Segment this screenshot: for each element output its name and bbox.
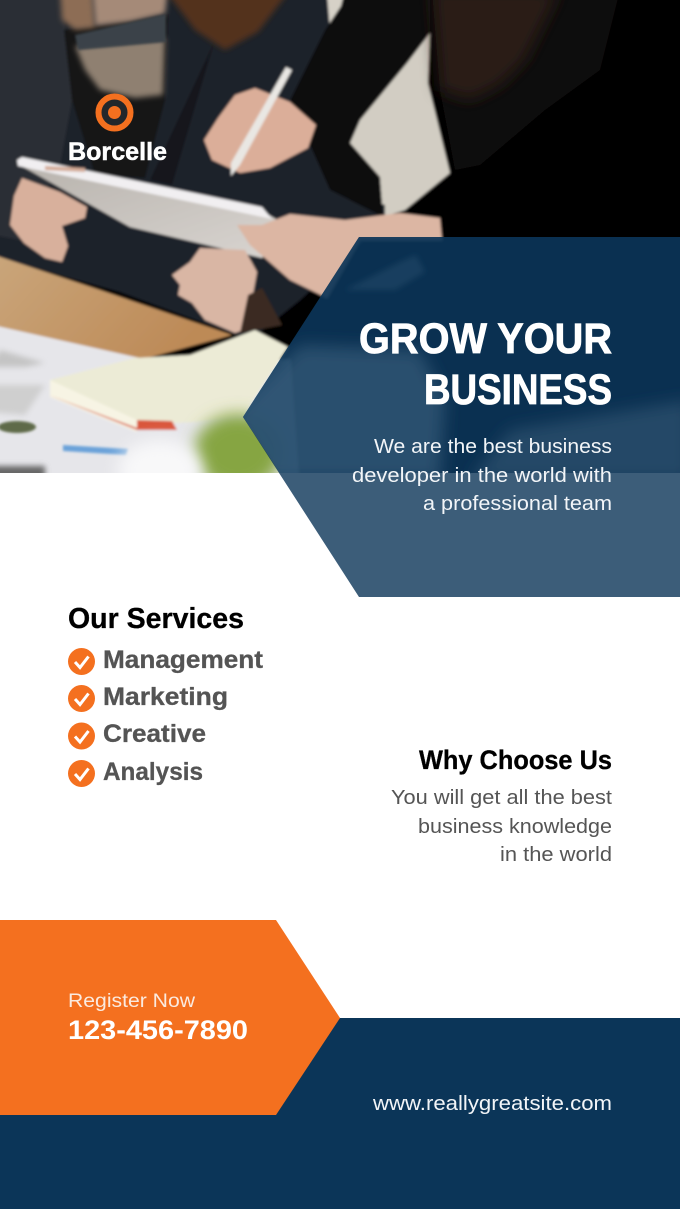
hand: writing <box>204 88 316 173</box>
icon: orange target <box>98 96 130 128</box>
service item: analysis: Analysis <box>103 758 203 786</box>
why choose us body text <box>391 787 612 866</box>
logo: Borcelle <box>68 96 167 166</box>
logo wordmark: Borcelle <box>68 138 167 166</box>
left jacket <box>0 0 385 340</box>
title: Grow Your Business <box>359 315 612 414</box>
service item: marketing: Marketing <box>103 683 228 711</box>
intro text: a professional team <box>423 493 612 515</box>
intro text <box>352 436 612 515</box>
website url: www.reallygreatsite.com <box>372 1093 612 1115</box>
plant and blurred object <box>194 414 282 490</box>
paper <box>0 324 296 473</box>
heading: our services: Our Services <box>68 603 244 635</box>
intro text: We are the best business <box>374 436 612 458</box>
footer navy band <box>0 1018 680 1209</box>
why choose us body text: You will get all the best <box>391 787 612 809</box>
sweater pattern <box>75 38 165 98</box>
service item: management: Management <box>103 646 264 674</box>
sweater <box>64 14 168 178</box>
notebook <box>50 330 288 425</box>
title: Grow Your Business: BUSINESS <box>424 366 612 414</box>
phone number: 123-456-7890 <box>68 1015 248 1045</box>
hair right person <box>432 0 620 170</box>
service item: creative: Creative <box>103 720 206 748</box>
heading: why choose us: Why Choose Us <box>419 745 612 775</box>
register label: Register Now <box>68 991 195 1012</box>
hair strands <box>60 0 95 30</box>
hero photo: business team with tablet <box>0 0 680 500</box>
service item: creative <box>68 720 206 750</box>
why choose us body text: business knowledge <box>418 816 612 838</box>
why choose us body text: in the world <box>500 844 612 866</box>
panel: translucent navy headline hexagon <box>230 237 680 597</box>
panel: our services <box>68 603 264 787</box>
wall <box>350 33 450 217</box>
wood table <box>0 247 232 360</box>
stylus <box>231 67 292 176</box>
intro text: developer in the world with <box>352 465 612 487</box>
hand: right <box>237 213 442 298</box>
tablet <box>18 164 288 258</box>
hand: holding tablet left <box>45 166 85 172</box>
panel: why choose us <box>391 745 612 866</box>
panel: orange register arrow <box>0 920 340 1115</box>
document marks <box>0 350 45 367</box>
hand: lower <box>172 248 258 333</box>
title: Grow Your Business: GROW YOUR <box>359 315 612 363</box>
